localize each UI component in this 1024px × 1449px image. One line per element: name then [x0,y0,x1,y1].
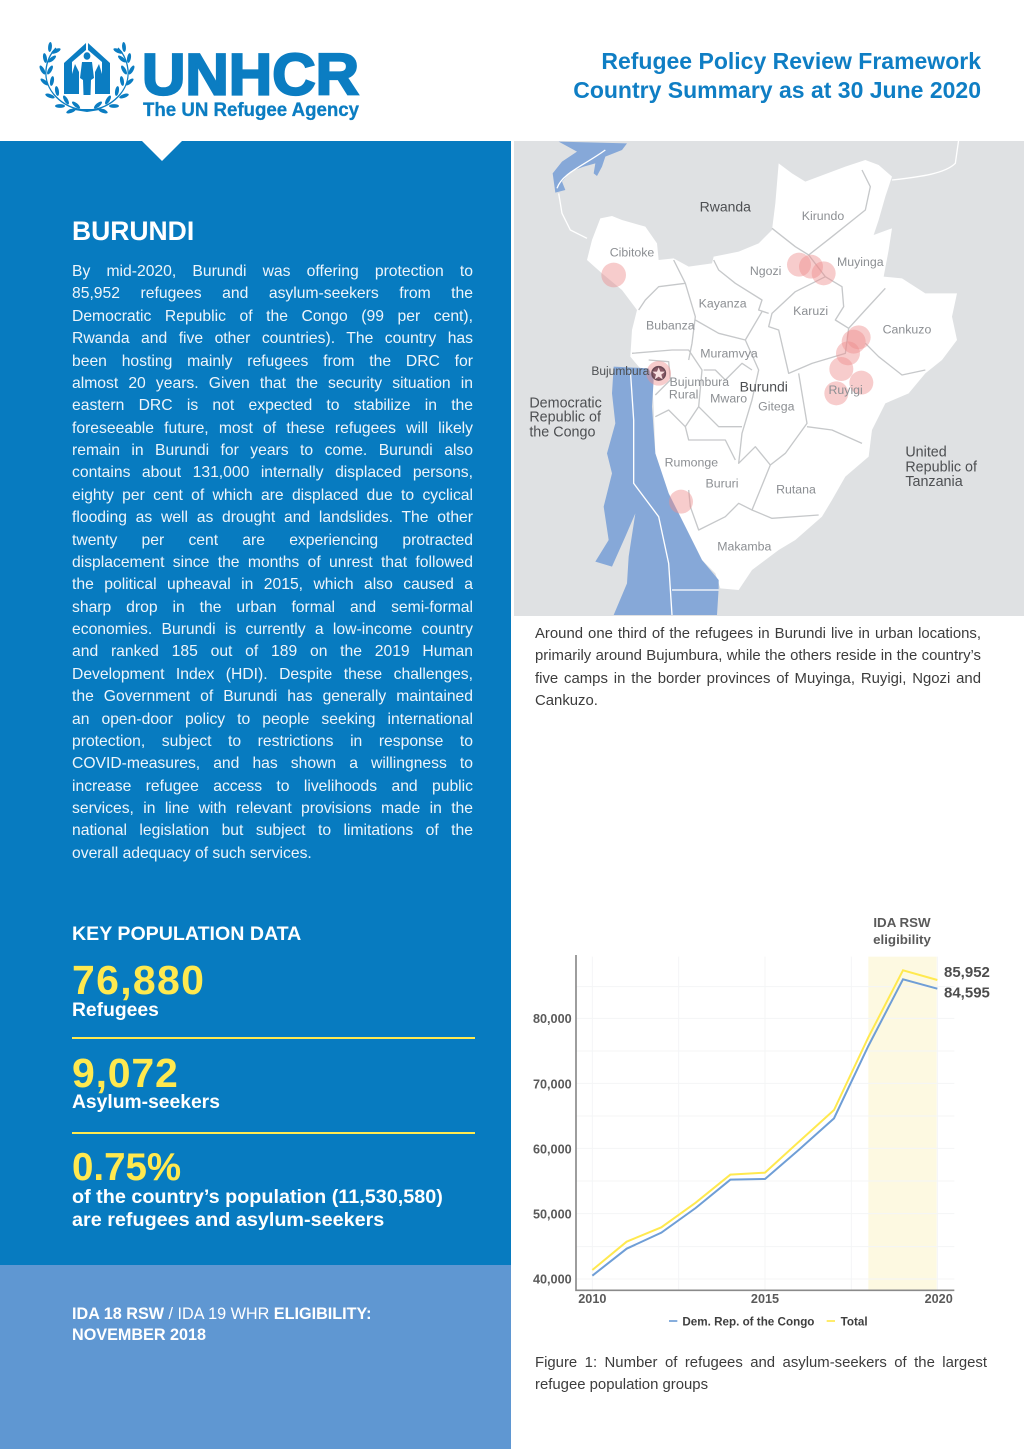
map background [512,140,1024,616]
header title [573,48,981,103]
wordmark: UNHCR [142,42,359,108]
line: total [592,970,937,1270]
figure caption: Figure 1: Number of refugees and asylum-seekers of the largest [535,1355,987,1371]
lake: north [553,142,627,193]
province labels: Ruyigi [829,383,863,397]
y axis labels: 40,000 [533,1273,572,1287]
header title: Country Summary as at 30 June 2020 [573,77,981,103]
refugee location circles [601,253,873,514]
band label [873,915,931,947]
country shape: Burundi [587,160,957,590]
panel: eligibility footer [0,1265,511,1449]
figure caption [535,1355,987,1393]
heading: key population data: KEY POPULATION DATA [72,923,301,945]
icon: capital star [652,367,665,380]
line chart: refugees and asylum-seekers [533,915,990,1328]
text block: country summary: By mid-2020, Burundi was offering protection to [72,263,473,280]
country labels: Republic of [529,410,601,426]
province labels: Makamba [717,540,772,554]
band label: IDA RSW [873,915,931,930]
text block: country summary [72,263,473,862]
icon: laurel and sheltering hands emblem [38,42,136,114]
province labels: Gitega [758,399,795,413]
country labels: Rwanda [700,198,751,214]
text block: country summary: protection, subject to restrictions in response to [72,733,473,750]
text block: country summary: services, in line with relevant provisions made in the [72,800,473,817]
figure caption: refugee population groups [535,1377,708,1393]
text block: country summary: Rwanda and five other countries). The country has [72,330,473,347]
map caption: Around one third of the refugees in Burundi live in urban locations, [535,626,981,642]
end value labels [944,964,990,1002]
text block: country summary: been hosting mainly refugees from the DRC for [72,352,473,370]
x axis labels: 2020 [925,1292,953,1306]
text block: country summary: Development Index (HDI). Despite these challenges, [72,666,473,683]
province labels: Rutana [776,483,816,497]
border line: north-east [892,140,959,180]
map: Burundi [514,141,1024,616]
stat: population share label: are refugees and asylum-seekers [72,1209,384,1231]
text block: country summary: the Government of Burundi has generally maintained [72,688,473,705]
text block: country summary: twenty per cent are experiencing protracted [72,532,473,548]
text block: country summary: contains about 131,000 internally displaced persons, [72,464,473,481]
end value labels: 84,595 [944,985,990,1002]
country labels: the Congo [529,425,595,441]
notch pointer [142,141,182,161]
stat: asylum-seekers number: 9,072 [72,1050,179,1096]
y axis labels [533,1012,572,1287]
x axis labels: 2015 [751,1292,779,1306]
text block: country summary: displacement since the months of unrest that followed [72,554,473,571]
eligibility text: NOVEMBER 2018 [72,1326,206,1344]
stat: refugees number: 76,880 [72,957,205,1003]
province labels: Ngozi [750,264,781,278]
y axis labels: 70,000 [533,1077,572,1091]
stat: population share label [72,1186,443,1231]
end value labels: 85,952 [944,964,990,981]
panel: left blue column [0,141,511,1265]
eligibility band [868,957,937,1290]
lake borders [630,370,719,615]
axes [576,955,954,1290]
border line: Rwanda [559,193,587,238]
province labels [610,209,931,554]
stat: population share label: of the country’s population (11,530,580) [72,1186,443,1208]
text block: country summary: national legislation but subject to limitations of the [72,822,473,839]
heading: country: BURUNDI [72,216,194,246]
text block: country summary: eastern DRC is not expected to stabilize in the [72,397,473,414]
country labels: Republic of [905,459,977,475]
province labels: Cankuzo [883,322,931,336]
province labels: Kirundo [802,209,844,223]
province labels: Bubanza [646,319,695,333]
y axis labels: 60,000 [533,1142,572,1156]
wordmark: The UN Refugee Agency [143,100,359,121]
country labels [529,198,977,490]
text block: country summary: foreseeable future, most of these refugees will likely [72,420,473,437]
country labels: Bujumbura [591,364,650,378]
legend: Dem. Rep. of the Congo [682,1315,814,1328]
text block: country summary: the political upheaval in 2015, which also caused a [72,576,473,593]
stat: asylum-seekers label: Asylum-seekers [72,1092,220,1113]
map caption: Cankuzo. [535,693,598,709]
logo: UNHCR [40,42,360,121]
province labels: Cibitoke [610,245,654,259]
map caption: primarily around Bujumbura, while the others reside in the country’s [535,648,981,664]
text block: country summary: increase refugee access to livelihoods and public [72,778,473,795]
province labels: Muramvya [700,346,758,360]
eligibility text: IDA 18 RSW / IDA 19 WHR ELIGIBILITY: [72,1305,372,1323]
y axis labels: 80,000 [533,1012,572,1026]
province labels: Mwaro [710,392,747,406]
text block: country summary: eighty per cent of which are displaced due to cyclical [72,487,473,504]
province borders [632,170,925,530]
province labels: Bujumbura [670,375,729,389]
text block: country summary: Democratic Republic of the Congo (99 per cent), [72,308,473,325]
province labels: Rural [669,388,698,402]
map caption: five camps in the border provinces of Muyinga, Ruyigi, Ngozi and [535,671,981,687]
band label: eligibility [873,932,931,947]
legend: Total [841,1315,868,1328]
text block: country summary: economies. Burundi is currently a low-income country [72,621,473,638]
country labels: Democratic [529,395,602,411]
province labels: Bururi [706,476,738,490]
x axis labels: 2010 [578,1292,606,1306]
text block: country summary: COVID-measures, and has shown a willingness to [72,755,473,772]
eligibility text [72,1305,372,1344]
country labels: United [905,445,947,461]
stat: population share number: 0.75% [72,1146,181,1189]
province labels: Muyinga [837,255,884,269]
text block: country summary: 85,952 refugees and asylum-seekers from the [72,285,473,302]
lake: Tanganyika [595,367,719,615]
text block: country summary: and ranked 185 out of 189 on the 2019 Human [72,643,473,660]
line: Dem. Rep. of the Congo [592,979,937,1276]
province labels: Kayanza [699,297,747,311]
map caption [535,626,981,709]
y axis labels: 50,000 [533,1208,572,1222]
province labels: Karuzi [793,304,828,318]
text block: country summary: an open-door policy to people seeking international [72,710,473,728]
province labels: Rumonge [665,456,718,470]
text block: country summary: flooding as well as drought and landslides. The other [72,509,473,526]
country labels: Burundi [740,379,788,395]
stat: refugees label: Refugees [72,1000,159,1021]
legend [669,1315,868,1328]
x axis labels [578,1292,953,1306]
text block: country summary: overall adequacy of such services. [72,845,312,862]
country labels: Tanzania [905,474,963,490]
text block: country summary: sharp drop in the urban formal and semi-formal [72,599,473,616]
text block: country summary: remain in Burundi for years to come. Burundi also [72,442,473,459]
header title: Refugee Policy Review Framework [601,48,981,74]
text block: country summary: almost 20 years. Given that the security situation in [72,375,473,392]
